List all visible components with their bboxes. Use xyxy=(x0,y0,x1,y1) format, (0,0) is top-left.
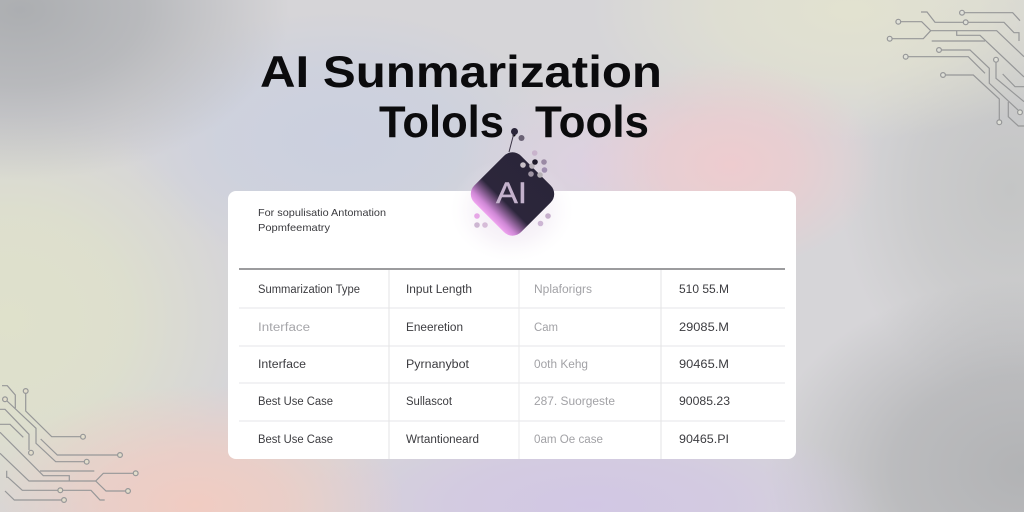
icon: AI chip: AI xyxy=(496,177,527,210)
table column 1 xyxy=(258,284,360,446)
glow under icon xyxy=(450,158,574,262)
title: AI Sunmarization xyxy=(260,48,662,97)
icon dots xyxy=(474,150,551,228)
table column 2: Pyrnanybot xyxy=(406,359,470,371)
table column 4: 29085.M xyxy=(679,322,729,334)
table column 3: 0oth Kehg xyxy=(534,359,588,371)
table column 1: Summarization Type xyxy=(258,284,360,296)
table column 4: 90465.PI xyxy=(679,434,729,446)
table column 2: Sullascot xyxy=(406,396,453,408)
table column 2: Wrtantioneard xyxy=(406,434,479,446)
title: Tolols xyxy=(379,98,504,147)
table column 2: Input Length xyxy=(406,284,472,296)
table column 3: 287. Suorgeste xyxy=(534,396,615,408)
title: Tools xyxy=(535,98,649,147)
circuit: bottom left xyxy=(0,386,138,502)
table column 4: 510 55.M xyxy=(679,284,729,296)
table column 2 xyxy=(406,284,479,446)
table column 1: Interface xyxy=(258,359,306,371)
table column 4: 90085.23 xyxy=(679,396,730,408)
icon: AI chip xyxy=(466,128,559,241)
panel: table card xyxy=(228,158,796,459)
table column 3: 0am Oe case xyxy=(534,434,603,446)
title xyxy=(260,48,662,147)
table column 4 xyxy=(679,284,730,446)
card subtitle: For sopulisatio Antomation xyxy=(258,207,386,219)
table column 4: 90465.M xyxy=(679,359,729,371)
card subtitle xyxy=(258,207,386,234)
table column 1: Best Use Case xyxy=(258,434,333,446)
table column 3 xyxy=(534,284,615,446)
table column 3: Cam xyxy=(534,322,558,334)
table column 3: Nplaforigrs xyxy=(534,284,592,296)
card subtitle: Popmfeematry xyxy=(258,222,331,234)
table rules xyxy=(239,268,785,459)
table column 1: Best Use Case xyxy=(258,396,333,408)
table column 1: Interface xyxy=(258,322,310,334)
circuit: top right xyxy=(887,10,1024,126)
table column 2: Eneeretion xyxy=(406,322,463,334)
